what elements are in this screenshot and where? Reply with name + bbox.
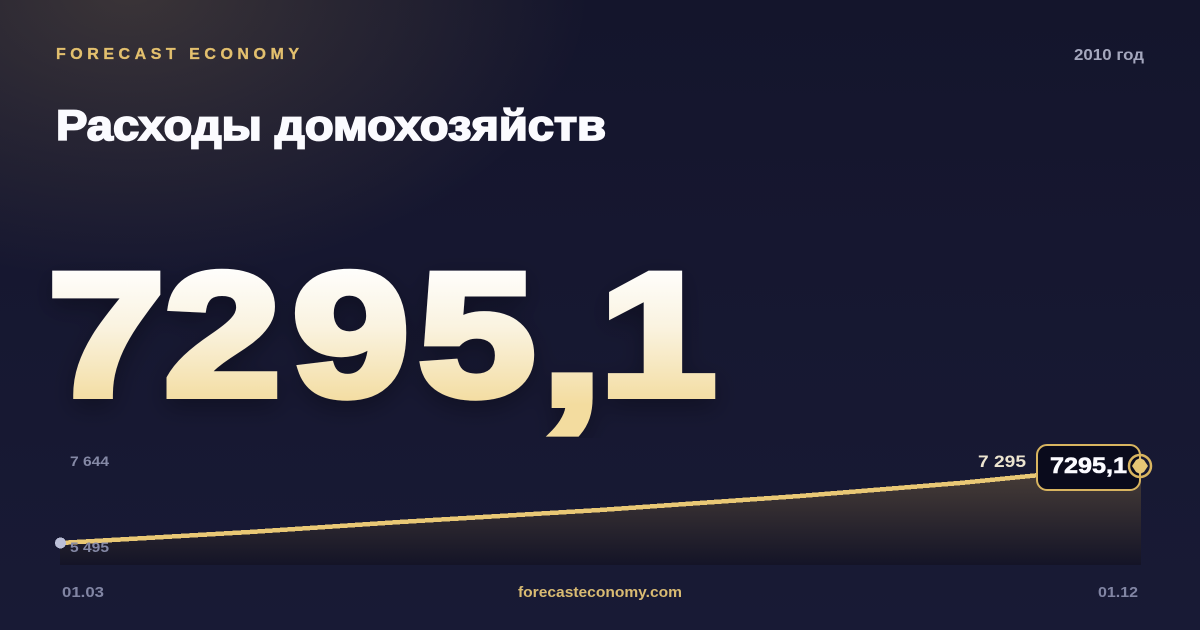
axis max label: 7 644 (70, 453, 109, 469)
last value label: 7 295 (978, 452, 1026, 471)
start point (55, 538, 66, 548)
brand label: FORECAST ECONOMY (56, 46, 299, 63)
chart line (60, 475, 1040, 543)
end point marker (1129, 455, 1151, 477)
axis min label: 5 495 (70, 539, 109, 555)
chart area fill (60, 466, 1141, 565)
source website: forecasteconomy.com (518, 584, 682, 601)
value callout: 7295,1 (1050, 453, 1127, 478)
big value: 7295,1 (48, 237, 716, 444)
area chart (55, 466, 1141, 565)
year label: 2010 год (1074, 47, 1144, 64)
end date: 01.12 (1098, 584, 1138, 601)
value callout (1037, 445, 1140, 490)
start date: 01.03 (62, 584, 104, 601)
title: Расходы домохозяйств (56, 102, 606, 150)
